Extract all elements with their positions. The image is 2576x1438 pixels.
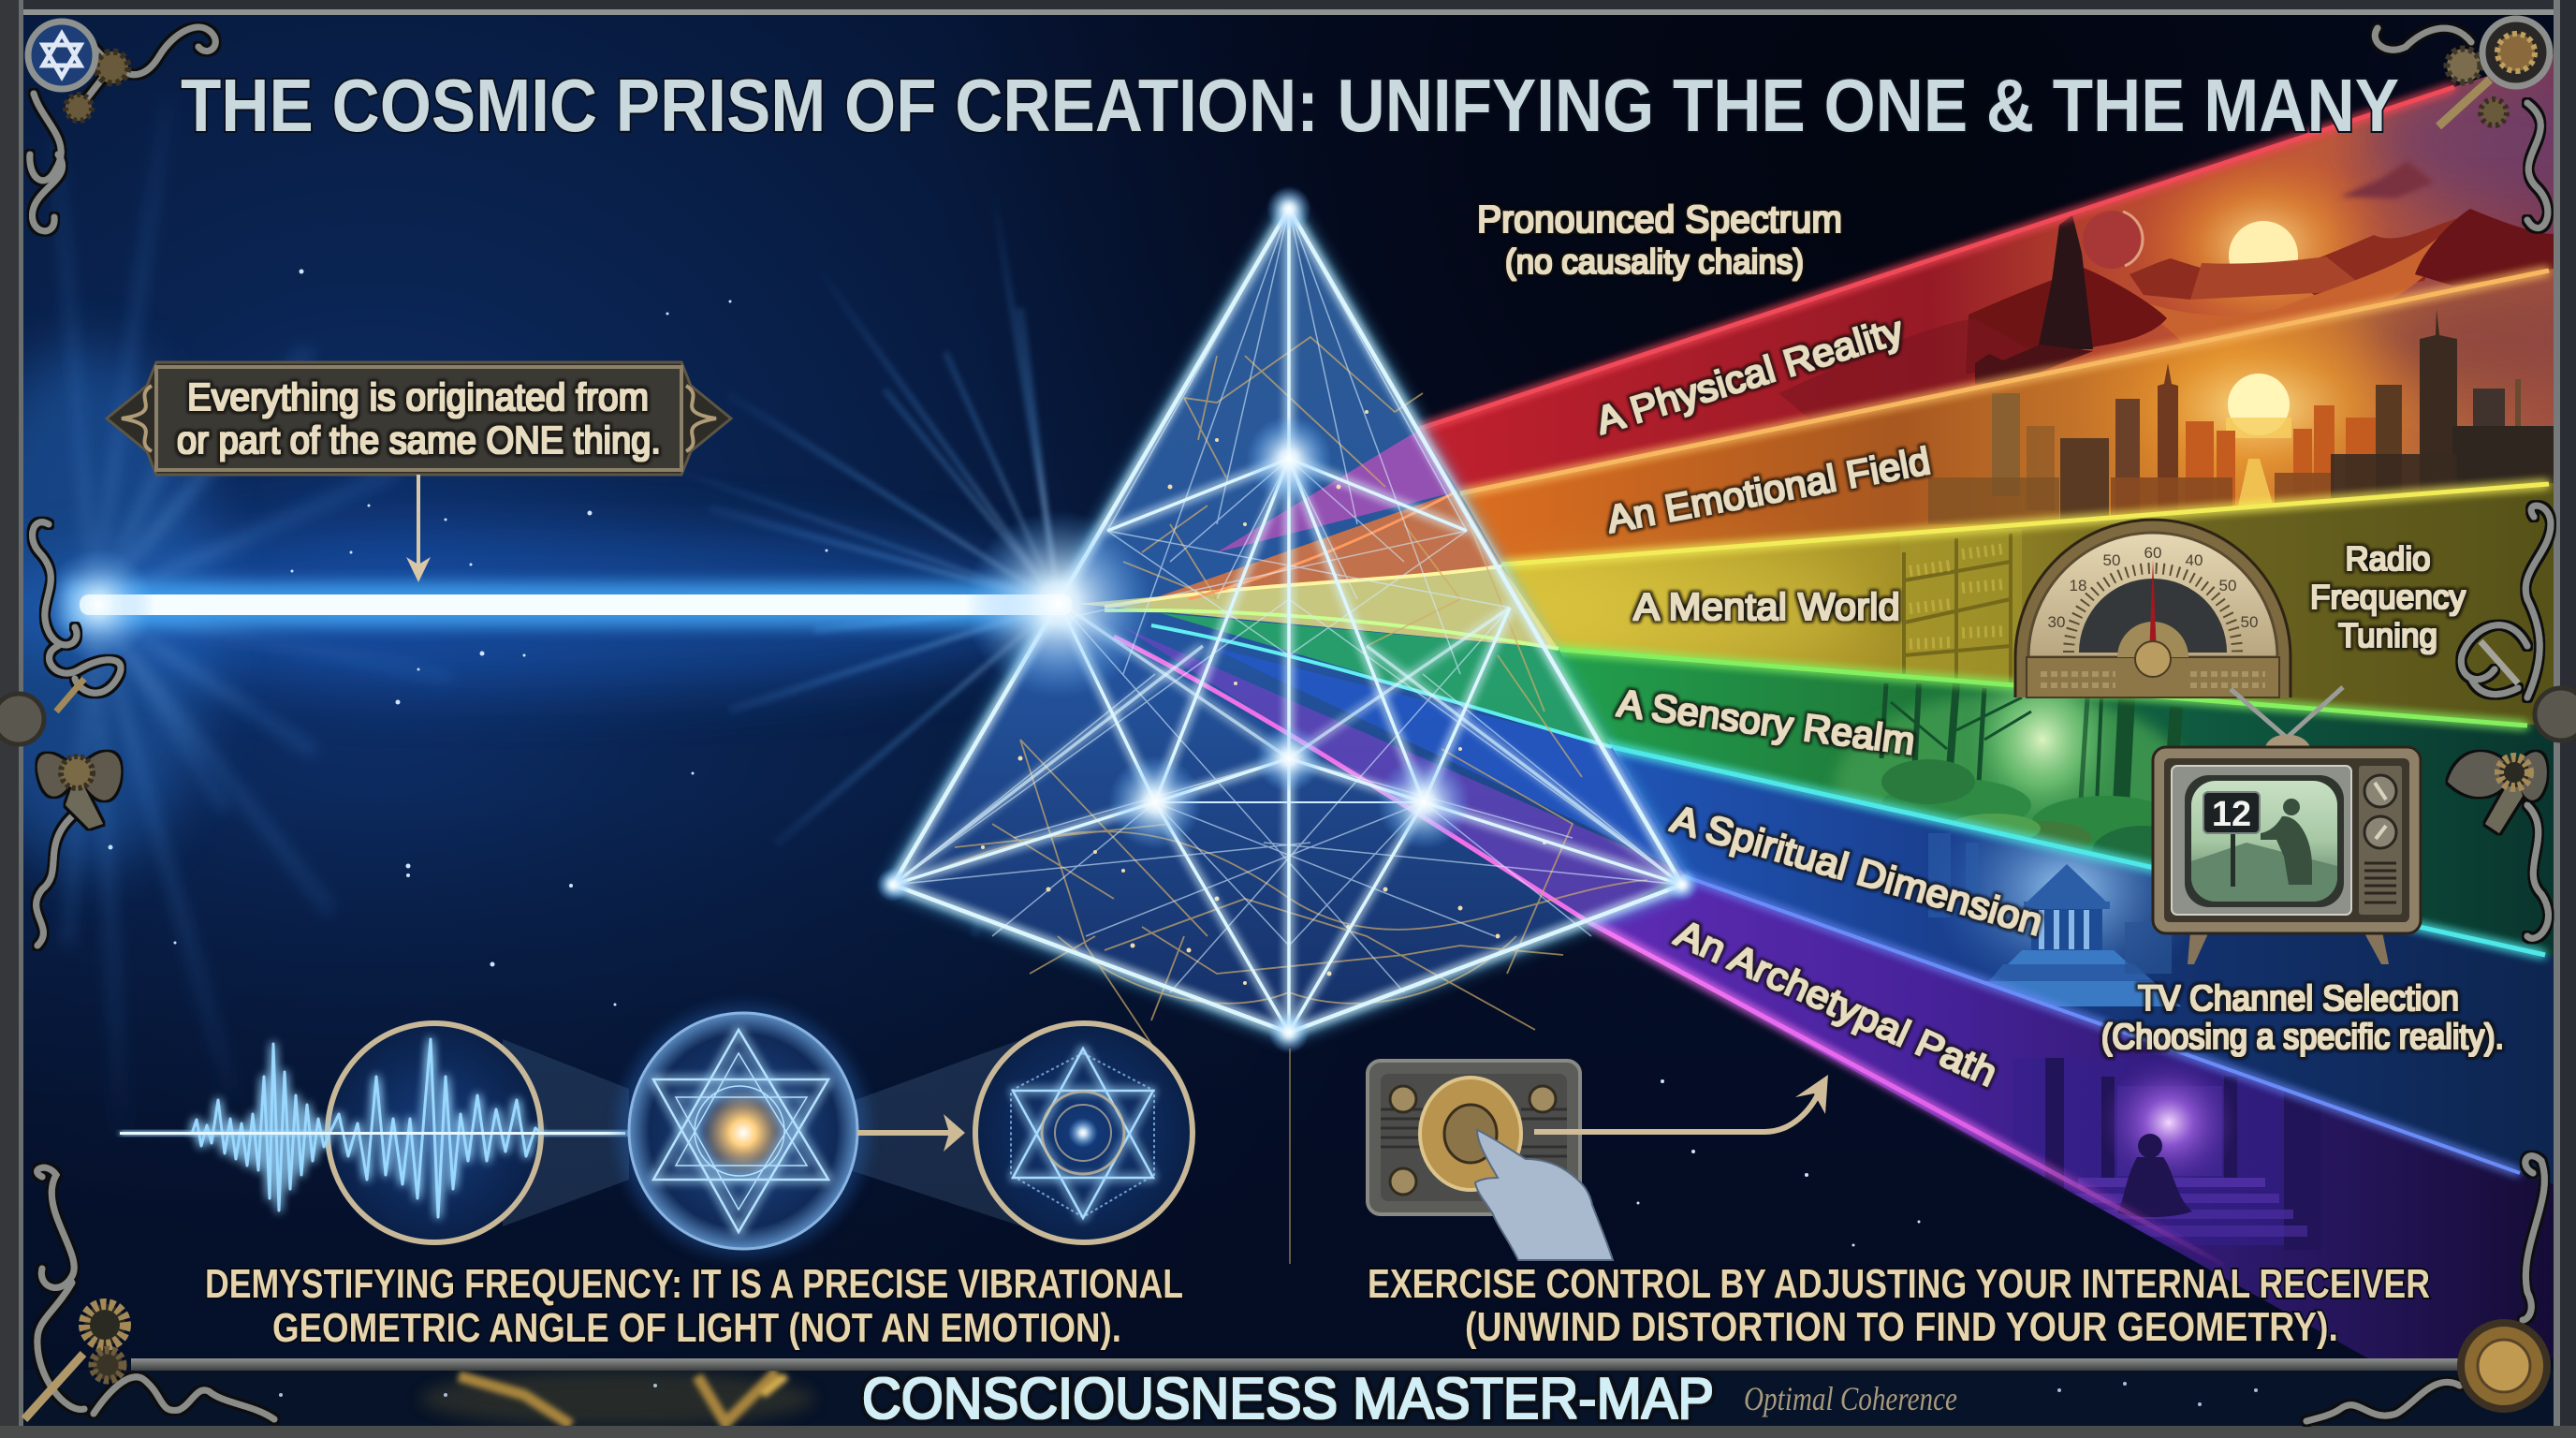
ornament: right-middle (2448, 506, 2576, 938)
refracted colour wedges inside prism (1076, 429, 1687, 923)
ornament: bottom-left corner (24, 1167, 274, 1419)
hand (1475, 1130, 1613, 1260)
stars (109, 270, 2464, 1294)
spectrum band: orange, emotional field city scene (1460, 269, 2576, 565)
spectrum edge lines (1419, 87, 2549, 1265)
faint white inner lines (893, 209, 1682, 992)
footer title: CONSCIOUSNESS MASTER-MAP (862, 1367, 1714, 1431)
caption: demystifying frequency: GEOMETRIC ANGLE OF LIGHT (NOT AN EMOTION). (272, 1305, 1121, 1351)
ornament: top-right corner (2375, 19, 2550, 228)
spectrum band: blue, spiritual dimension temple scene (1600, 744, 2554, 1184)
prism node flares (876, 186, 1699, 1053)
icon: television (2153, 687, 2421, 964)
icon: radio frequency gauge (2015, 520, 2291, 697)
ornament: top-left corner (28, 22, 215, 231)
band label: a physical reality: A Physical Reality (1591, 308, 1909, 442)
arrow: dial to spectrum (1534, 1075, 1828, 1132)
icon: radio frequency gauge: 40 (2186, 551, 2203, 569)
light rays from the prism entry (642, 139, 1059, 938)
arrow: sphere to geometry (857, 1114, 965, 1152)
band label: a sensory realm: A Sensory Realm (1615, 681, 1917, 763)
callout plaque: the one thing: Everything is originated from (187, 375, 649, 418)
caption: exercise control: (UNWIND DISTORTION TO FIND YOUR GEOMETRY). (1465, 1304, 2338, 1350)
cones (503, 1039, 1022, 1226)
icon: radio frequency gauge: 60 (2144, 544, 2161, 562)
magnifier circle: hexagon geometry (975, 1023, 1193, 1242)
spectrum band: purple, archetypal path hall scene (1590, 875, 2554, 1358)
bow with gear (2448, 752, 2547, 833)
refracted ray lines inside prism (1105, 492, 1612, 923)
ornament: bottom-right corner (2306, 1156, 2547, 1421)
label: radio frequency tuning: Radio (2346, 539, 2430, 578)
spectrum band: green, sensory realm forest scene (1551, 646, 2554, 957)
planet (2083, 211, 2143, 269)
callout plaque: the one thing: or part of the same ONE thing. (177, 418, 661, 462)
gold sacred-geometry lines (936, 337, 1647, 1058)
band label: a mental world: A Mental World (1633, 585, 1900, 628)
label: tv channel selection (2101, 979, 2504, 1057)
footer strip (24, 1367, 2554, 1431)
label: radio frequency tuning (2310, 539, 2466, 654)
icon: receiver dial with hand (1368, 1061, 1613, 1260)
magnifier circle: waveform (328, 1023, 541, 1242)
central geometry sphere (618, 1005, 869, 1256)
footer signature: Optimal Coherence (1744, 1380, 1957, 1417)
light rays from the source (49, 94, 454, 1137)
band label: a spiritual dimension: A Spiritual Dimension (1666, 797, 2047, 944)
vertical divider (1289, 1049, 1291, 1264)
label: pronounced spectrum: Pronounced Spectrum (1477, 198, 1842, 241)
icon: radio frequency gauge: 50 (2241, 613, 2258, 631)
label: pronounced spectrum: (no causality chains) (1505, 242, 1804, 281)
frequency diagram: wave to geometry (120, 1005, 1193, 1256)
bright structural lines (893, 209, 1682, 1033)
caption: demystifying frequency (205, 1261, 1183, 1351)
band label: an emotional field: An Emotional Field (1603, 439, 1934, 541)
label: radio frequency tuning: Frequency (2310, 578, 2466, 616)
library shelves (1900, 529, 2022, 688)
spectrum band: yellow, mental world library scene (1498, 483, 2554, 726)
spectrum band: red, physical reality scene (1419, 54, 2576, 493)
caption: demystifying frequency: DEMYSTIFYING FREQUENCY: IT IS A PRECISE VIBRATIONAL (205, 1261, 1183, 1307)
channel number: 12 (2212, 795, 2251, 834)
prism (876, 186, 1699, 1058)
label: tv channel selection: (Choosing a specific reality). (2101, 1018, 2504, 1057)
band label: an archetypal path: An Archetypal Path (1669, 911, 2004, 1094)
icon: radio frequency gauge: 30 (2048, 613, 2065, 631)
callout plaque: the one thing (107, 362, 731, 475)
white light beam (42, 510, 1152, 697)
ornament: left-middle (0, 522, 121, 946)
icon: radio frequency gauge: 50 (2219, 577, 2236, 594)
caption: exercise control (1368, 1261, 2430, 1350)
bow with gear (37, 752, 121, 829)
label: tv channel selection: TV Channel Selection (2138, 979, 2459, 1019)
meditating figure (2117, 1134, 2192, 1217)
waveform (192, 1039, 541, 1217)
label: radio frequency tuning: Tuning (2338, 616, 2437, 654)
icon: radio frequency gauge: 18 (2070, 577, 2086, 594)
gold and white dust (981, 410, 1546, 985)
arrow: plaque to beam (406, 475, 431, 582)
icon: radio frequency gauge: 50 (2103, 551, 2120, 569)
label: pronounced spectrum (1477, 198, 1842, 281)
beam line through diagram (120, 1131, 644, 1136)
